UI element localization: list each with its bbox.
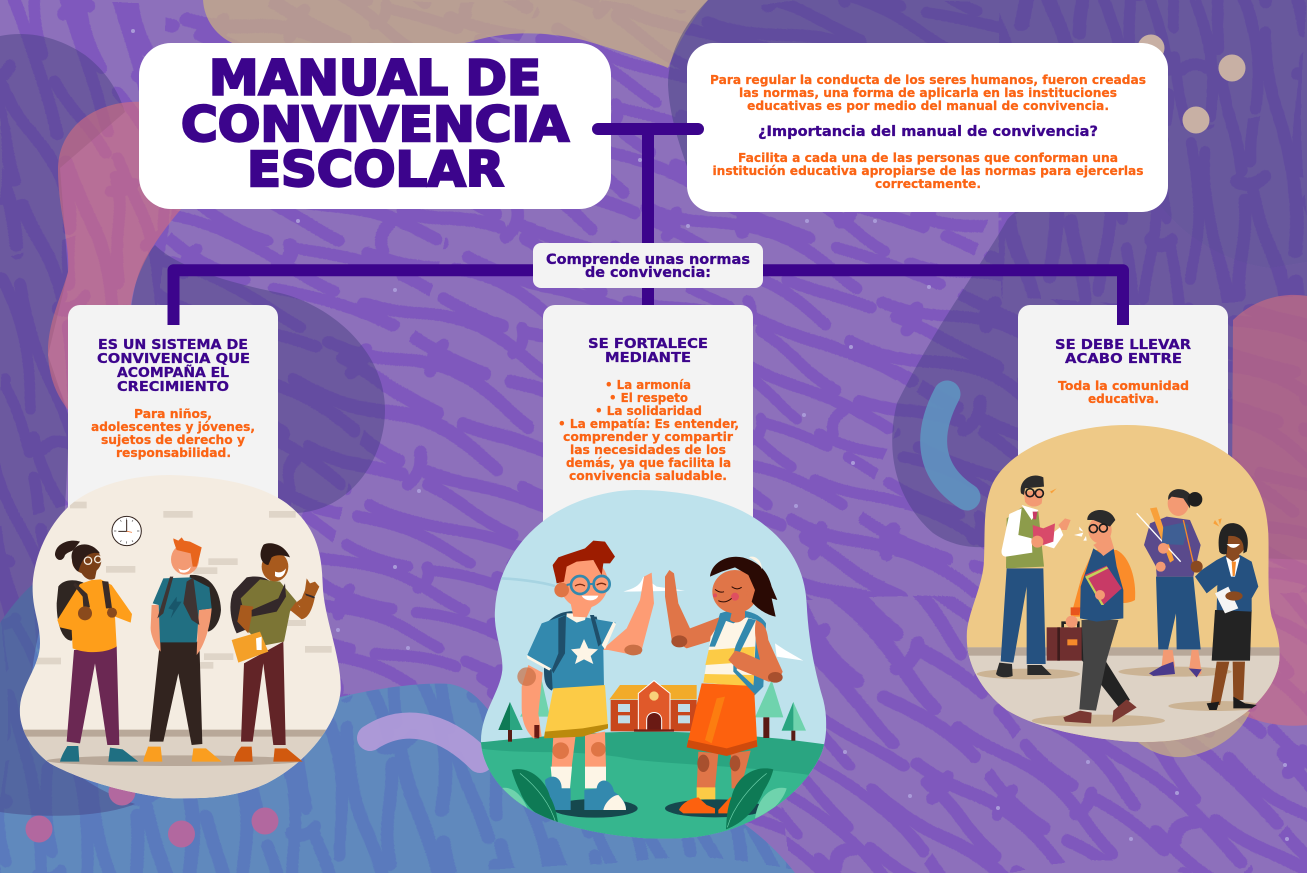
illustration: school community (966, 425, 1280, 742)
teacher in blazer (1191, 518, 1258, 710)
intro paragraph: educativas es por medio del manual de convivencia. (747, 98, 1109, 113)
heading (588, 336, 708, 366)
student 1 (55, 541, 138, 762)
card: left (68, 305, 278, 535)
body text (91, 406, 255, 460)
heading: CONVIVENCIA QUE (97, 351, 250, 367)
body list: • La solidaridad (595, 403, 702, 418)
body text: sujetos de derecho y (101, 432, 245, 447)
title: ESCOLAR (247, 142, 504, 198)
body list: comprender y compartir (563, 429, 734, 444)
blob: pink left (48, 100, 182, 415)
heading: ACOMPAÑA EL (117, 364, 229, 381)
body list: • El respeto (609, 390, 688, 405)
label box (533, 243, 763, 288)
answer paragraph: institución educativa apropiarse de las normas para ejercerlas (712, 163, 1144, 178)
blob: dark top right (668, 0, 1307, 268)
answer paragraph: Facilita a cada una de las personas que conforman una (738, 150, 1118, 165)
blob: pink right (1225, 295, 1307, 726)
body text: Para niños, (134, 406, 212, 421)
teacher with folders (1137, 489, 1202, 677)
student 3 (230, 543, 319, 762)
shadows (552, 799, 638, 818)
body text: adolescentes y jóvenes, (91, 419, 255, 434)
connector lines (174, 129, 1123, 325)
heading: ES UN SISTEMA DE (98, 337, 248, 353)
pink circles (26, 778, 278, 848)
heading: ACABO ENTRE (1065, 351, 1182, 367)
question: ¿Importancia del manual de convivencia? (758, 124, 1098, 140)
stroke: blue band (934, 394, 967, 497)
blob: dark mid right (892, 205, 1307, 560)
intro paragraph (710, 72, 1146, 113)
student walking (1063, 510, 1137, 723)
briefcase (1047, 623, 1085, 661)
stroke: lilac band (370, 726, 480, 760)
intro panel (687, 43, 1168, 212)
trees (498, 680, 806, 742)
body text (1058, 378, 1189, 406)
blob: tan top (203, 0, 708, 68)
body text: educativa. (1088, 391, 1159, 406)
heading: SE DEBE LLEVAR (1055, 337, 1192, 353)
body list: las necesidades de los (570, 442, 726, 457)
heading: MEDIANTE (605, 350, 691, 366)
card: center (543, 305, 753, 535)
label box: de convivencia: (585, 265, 711, 281)
girl (665, 557, 783, 813)
body list: convivencia saludable. (569, 468, 727, 483)
title panel (139, 43, 611, 209)
blob: blue bottom (0, 584, 795, 873)
intro paragraph: Para regular la conducta de los seres humanos, fueron creadas (710, 72, 1146, 87)
title: MANUAL DE (209, 50, 541, 106)
body list (558, 377, 739, 483)
blob: tan under right scene (1130, 700, 1250, 757)
student 2 (143, 537, 222, 762)
leaves (500, 768, 787, 829)
body text: Toda la comunidad (1058, 378, 1189, 393)
blob: dark left strip (0, 34, 135, 816)
label box: Comprende unas normas (546, 252, 750, 268)
illustration: three students (20, 475, 341, 798)
heading (1055, 337, 1192, 367)
blob: dark mid left (130, 245, 385, 513)
body list: • La armonía (605, 377, 691, 392)
title (181, 50, 569, 198)
heading: SE FORTALECE (588, 336, 708, 352)
heading: CRECIMIENTO (117, 379, 229, 395)
body list: demás, ya que facilita la (566, 455, 731, 470)
title: CONVIVENCIA (181, 97, 569, 153)
boy (517, 541, 654, 810)
school (609, 681, 697, 732)
body text: responsabilidad. (116, 445, 231, 460)
card: right (1018, 305, 1228, 475)
teacher with book (996, 476, 1071, 677)
answer paragraph: correctamente. (875, 176, 981, 191)
heading (97, 337, 250, 395)
beige circles (1138, 34, 1246, 134)
answer paragraph (712, 150, 1144, 191)
illustration: high five (481, 490, 826, 839)
clock (112, 516, 141, 546)
intro paragraph: las normas, una forma de aplicarla en las instituciones (739, 85, 1117, 100)
body list: • La empatía: Es entender, (558, 416, 739, 431)
